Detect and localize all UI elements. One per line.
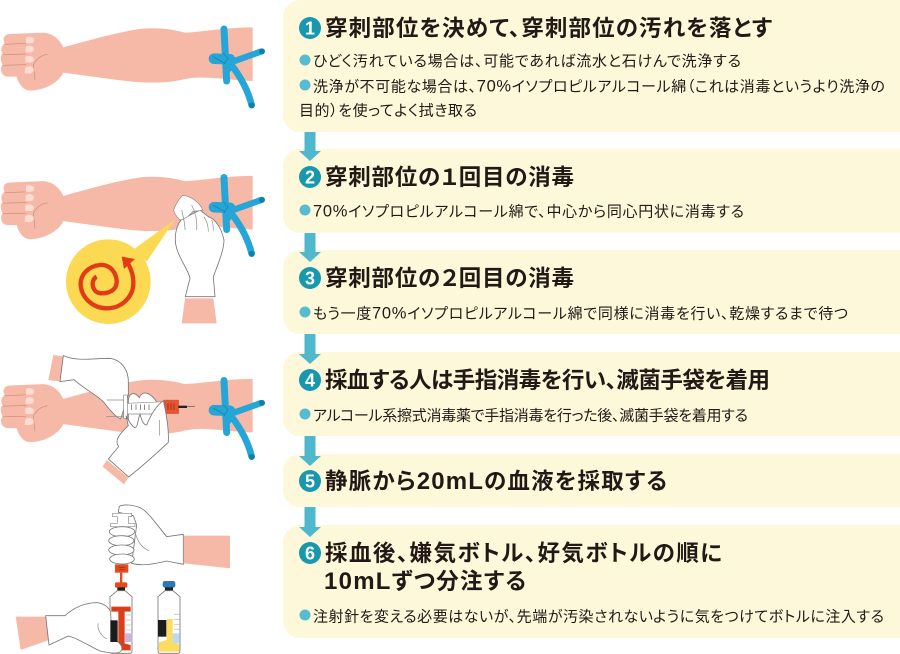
step 6 number badge (299, 542, 321, 564)
lower forearm (16, 617, 49, 650)
step 4 number badge (299, 369, 321, 391)
step 2 bullet: 70%イソプロピルアルコール綿で、中心から同心円状に消毒する (313, 202, 744, 220)
arrow: step 4 to 5 (299, 436, 321, 466)
syringe hub and needle (115, 564, 128, 583)
step 2 number badge (299, 166, 321, 188)
illustration: first disinfection (1, 176, 265, 324)
illustration: injecting blood into culture bottles (16, 505, 230, 653)
step 4 bullet: アルコール系擦式消毒薬で手指消毒を行った後、滅菌手袋を着用する (313, 408, 748, 424)
step 6 heading: 10mLずつ分注する (324, 568, 526, 595)
panel: step 3 (283, 250, 900, 334)
arrow: step 3 to 4 (299, 334, 321, 364)
step 5 heading: 静脈から20mLの血液を採取する (325, 468, 667, 495)
bottle label (110, 620, 118, 642)
illustration: glove and syringe on arm (1, 355, 265, 484)
step 1 bullets: 目的）を使ってよく拭き取る (299, 102, 477, 120)
arrow: step 2 to 3 (299, 233, 321, 262)
panel: step 1 (283, 0, 900, 132)
step 2 heading: 穿刺部位の１回目の消毒 (325, 165, 574, 190)
step 2 number badge: 2 (305, 168, 315, 188)
step 5 number badge: 5 (305, 472, 315, 492)
anaerobic bottle (110, 582, 132, 653)
step 3 bullet: もう一度70%イソプロピルアルコール綿で同様に消毒を行い、乾燥するまで待つ (313, 304, 848, 322)
step 3 heading: 穿刺部位の２回目の消毒 (325, 266, 574, 291)
step 1 number badge: 1 (305, 18, 315, 38)
lower glove (46, 603, 122, 653)
illustration: arm with tourniquet (1, 27, 265, 108)
top forearm (184, 536, 230, 568)
step 4 number badge: 4 (305, 370, 315, 390)
top glove with syringe (109, 505, 183, 565)
panel: step 2 (283, 149, 900, 233)
panel: step 5 (283, 454, 900, 507)
step 6 heading (324, 541, 722, 595)
step 3 number badge: 3 (305, 268, 315, 288)
step 1 bullets: 洗浄が不可能な場合は、70%イソプロピルアルコール綿（これは消毒というより洗浄の (313, 78, 885, 96)
step 5 number badge (299, 470, 321, 492)
step 1 number badge (299, 17, 321, 39)
step 6 heading: 採血後、嫌気ボトル、好気ボトルの順に (325, 541, 722, 566)
panel: step 6 (283, 525, 900, 638)
step 6 bullet: 注射針を変える必要はないが、先端が汚染されないように気をつけてボトルに注入する (313, 608, 884, 626)
step 1 bullets: ひどく汚れている場合は、可能であれば流水と石けんで洗浄する (313, 53, 741, 70)
step 1 heading: 穿刺部位を決めて、穿刺部位の汚れを落とす (325, 16, 773, 41)
step 6 number badge: 6 (305, 544, 315, 564)
step 3 number badge (299, 267, 321, 289)
aerobic bottle (158, 581, 180, 653)
arrow: step 5 to 6 (299, 507, 321, 537)
arrow: step 1 to 2 (299, 132, 321, 161)
panel: step 4 (283, 352, 900, 436)
step 1 bullets (299, 53, 885, 120)
step 4 heading: 採血する人は手指消毒を行い、滅菌手袋を着用 (325, 368, 770, 393)
